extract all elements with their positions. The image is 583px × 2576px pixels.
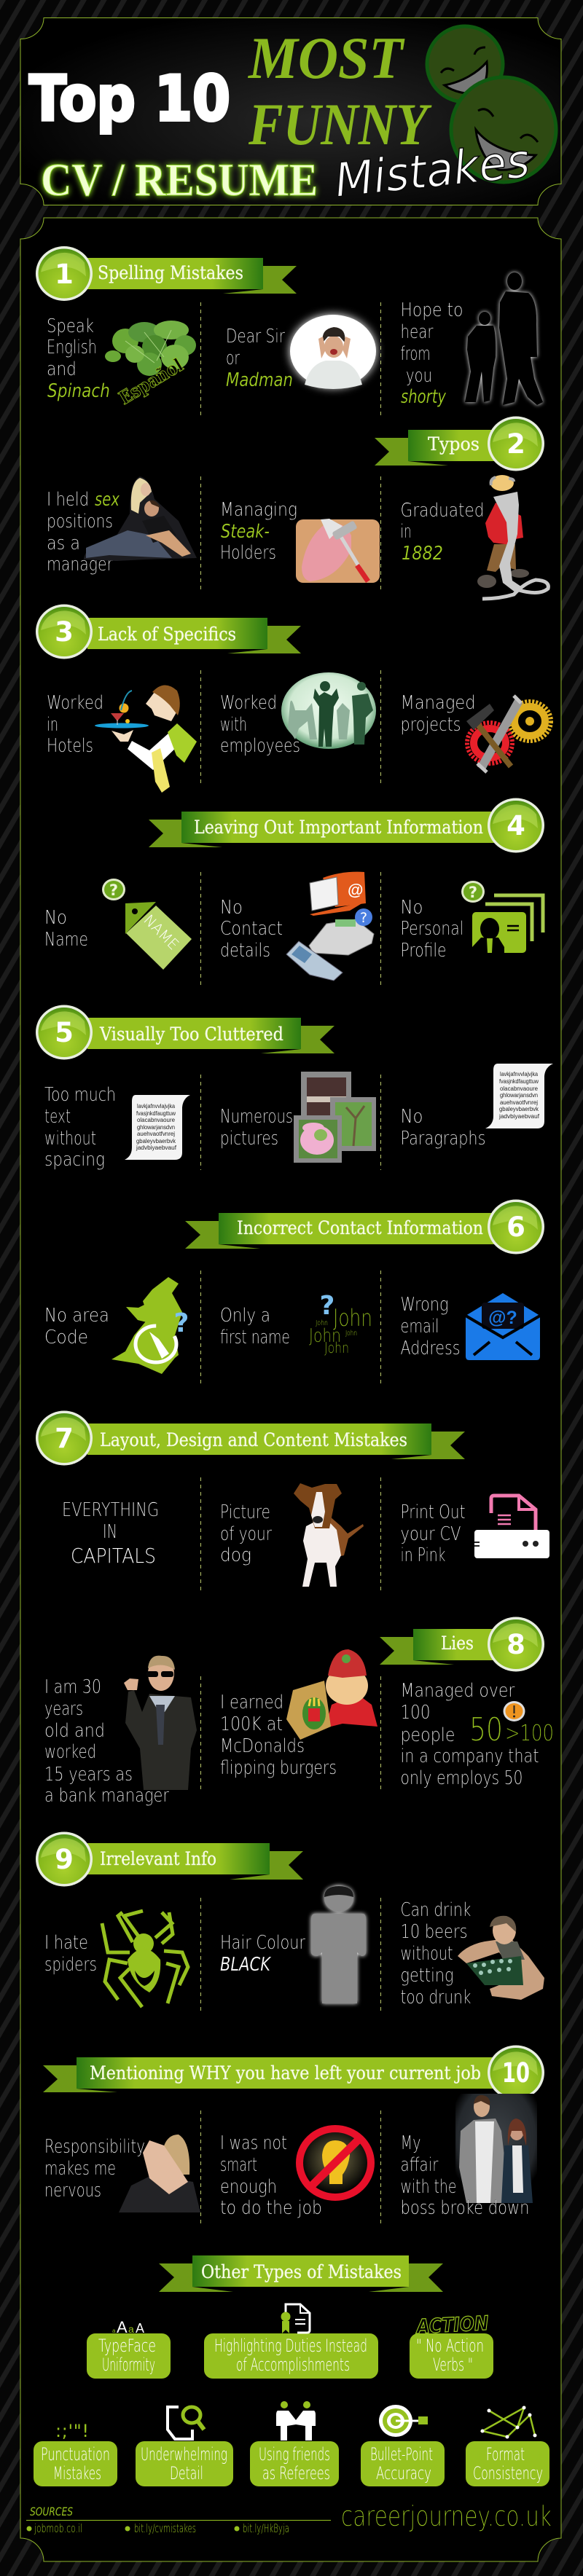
card: typeface uniformity — [87, 2333, 171, 2379]
text: worked in hotels: Worked — [47, 692, 103, 714]
text: no contact details: No — [220, 897, 243, 919]
heading: section 7 ribbon: Layout, Design and Content Mistakes — [100, 1429, 407, 1450]
heading: section 5 ribbon: 5 — [55, 1017, 74, 1048]
text: too much text without spacing — [44, 1084, 116, 1171]
card: highlighting duties: Highlighting Duties Instead — [214, 2336, 367, 2356]
text: picture of your dog: of your — [220, 1523, 272, 1545]
icon: paragraph-free paper: fvasjnkdfaugttuw — [499, 1078, 539, 1085]
icon: certificate document — [281, 2304, 310, 2333]
card: bullet-point accuracy — [361, 2441, 445, 2486]
text: i held sex positions: as a — [47, 533, 80, 554]
heading: section 6 ribbon: Incorrect Contact Information — [237, 1217, 483, 1238]
card: punctuation mistakes: Mistakes — [53, 2463, 101, 2483]
text: wrong email address — [401, 1294, 461, 1359]
heading: section 4 ribbon: Leaving Out Important Information — [194, 817, 483, 838]
text: hope to hear from you shorty: Hope to — [401, 299, 463, 321]
text: i was not smart enough — [220, 2132, 322, 2219]
text: hope to hear from you shorty — [401, 299, 463, 408]
text: no paragraphs: No — [401, 1106, 423, 1128]
text: i earned 100k at mcdonalds: McDonalds — [220, 1735, 305, 1757]
card: underwhelming detail: Underwhelming — [141, 2444, 227, 2465]
icon: punctuation marks: :;'"! — [55, 2421, 89, 2441]
icon: paragraph-free paper: auehvaotfvnrej — [500, 1099, 538, 1106]
text: managing steak-holders: Holders — [220, 542, 276, 564]
text: no name: Name — [44, 929, 88, 951]
text: my affair with the boss broke down: boss broke down — [401, 2197, 529, 2219]
text: wrong email address: email — [401, 1316, 439, 1338]
text: no area code — [44, 1305, 109, 1348]
text: speak english and spinach: Speak — [47, 315, 94, 337]
icon: crowded paper: jadvbiyaebvauf — [136, 1144, 177, 1151]
card: typeface uniformity: Uniformity — [102, 2355, 155, 2375]
text: i was not smart enough: to do the job — [220, 2197, 322, 2219]
heading: section 2 ribbon: 2 — [506, 428, 525, 460]
card: no action verbs — [410, 2333, 493, 2379]
sources: bit.ly/cvmistakes — [134, 2521, 196, 2535]
text: i was not smart enough: I was not — [220, 2132, 287, 2154]
text: too much text without spacing: text — [44, 1106, 71, 1128]
icon: blue envelope: @? — [488, 1308, 517, 1328]
text: hope to hear from you shorty: you — [406, 365, 432, 387]
text: i am 30 years old: a bank manager — [44, 1785, 169, 1807]
text: i held sex positions — [47, 489, 120, 576]
card: no action verbs: " No Action — [416, 2336, 484, 2356]
text: wrong email address: Wrong — [401, 1294, 449, 1316]
text: no contact details: Contact — [220, 918, 283, 940]
sources: jobmob.co.il — [34, 2521, 82, 2535]
text: i earned 100k at mcdonalds: 100K at — [220, 1713, 283, 1735]
text: managed over 100 people: only employs 50 — [401, 1767, 523, 1789]
heading: section 6 ribbon — [185, 1199, 544, 1254]
icon: constellation lines — [481, 2406, 536, 2439]
text: print out your cv in pink — [401, 1501, 465, 1566]
card: punctuation mistakes — [34, 2441, 117, 2486]
text: wrong email address: Address — [401, 1338, 461, 1359]
text: too much text without spacing: Too much — [44, 1084, 116, 1106]
text: my affair with the boss broke down: affair — [401, 2154, 439, 2176]
icon: question and john word cloud: John — [333, 1304, 372, 1332]
card: bullet-point accuracy: Accuracy — [376, 2463, 431, 2483]
text: managed over 100 people: Managed over — [401, 1680, 515, 1702]
title: cv / resume: CV / RESUME — [41, 154, 318, 205]
text: picture of your dog — [220, 1501, 272, 1566]
icon: profile card with question: ? — [469, 884, 477, 901]
text: i was not smart enough: smart — [220, 2154, 257, 2176]
icon: name tag with question: NAME — [140, 911, 182, 954]
text: managed projects — [401, 692, 475, 736]
heading: section 5 ribbon — [36, 1005, 334, 1059]
text: dear sir or madman — [226, 326, 293, 391]
text: can drink 10 beers — [401, 1899, 471, 2008]
text: i am 30 years old: I am 30 — [44, 1676, 101, 1698]
icon: typeface letters: a — [112, 2328, 116, 2334]
card: highlighting duties — [204, 2333, 378, 2379]
image: embracing couple — [84, 476, 197, 561]
text: hope to hear from you shorty: shorty — [401, 386, 446, 408]
heading: section 1 ribbon: 1 — [55, 259, 74, 290]
text: no contact details — [220, 897, 283, 962]
text: my affair with the boss broke down: with the — [401, 2176, 456, 2198]
text: worked in hotels: in — [47, 714, 58, 736]
text: graduated in 1882: in — [401, 521, 411, 543]
heading: section 2 ribbon — [375, 417, 544, 471]
heading: section 6 ribbon: 6 — [506, 1212, 525, 1243]
icon: crowded paper: olacabnvaoure — [137, 1117, 176, 1123]
text: managed over 100 people: 100 — [401, 1702, 430, 1724]
icon: warning and 50>100: >100 — [505, 1721, 554, 1746]
text: speak english and spinach: Spinach — [47, 380, 110, 402]
icon: crowded paper — [125, 1095, 190, 1160]
heading: section 2 ribbon: Typos — [428, 433, 480, 455]
icon: question and john word cloud: John — [324, 1339, 349, 1356]
text: can drink 10 beers: Can drink — [401, 1899, 471, 1921]
icon: typeface letters: a — [128, 2323, 134, 2335]
text: no area code: Code — [44, 1327, 88, 1348]
heading: section 4 ribbon: 4 — [506, 810, 525, 841]
text: i held sex positions: positions — [47, 511, 113, 533]
text: no area code: No area — [44, 1305, 109, 1327]
text: i held sex positions: I held — [47, 489, 89, 511]
title: mistakes: Mistakes — [332, 134, 532, 208]
text: dear sir or madman: Madman — [226, 369, 293, 391]
text: i am 30 years old: 15 years as — [44, 1764, 133, 1786]
text: managed projects: Managed — [401, 692, 475, 714]
heading: section 3 ribbon: 3 — [55, 616, 74, 648]
icon: uk map with phone — [111, 1277, 189, 1374]
image: employees silhouettes circle — [281, 672, 376, 749]
text: my affair with the boss broke down — [401, 2132, 529, 2219]
text: i held sex positions: sex — [95, 489, 120, 511]
text: hair colour black — [220, 1932, 305, 1976]
text: no personal profile: Profile — [401, 940, 446, 962]
icon: name tag with question — [102, 879, 192, 970]
text: everything in capitals: CAPITALS — [71, 1544, 156, 1568]
icon: typeface letters: A — [117, 2318, 128, 2336]
text: i earned 100k at mcdonalds: flipping burgers — [220, 1757, 337, 1779]
text: can drink 10 beers: without — [401, 1943, 453, 1965]
text: worked in hotels — [47, 692, 103, 757]
image: couple on dark photo backdrop — [455, 2094, 537, 2203]
text: hair colour black: BLACK — [220, 1954, 272, 1976]
text: i am 30 years old: worked — [44, 1741, 96, 1763]
text: no personal profile: No — [401, 897, 423, 919]
icon: question and john word cloud: John — [316, 1319, 328, 1327]
text: picture of your dog: dog — [220, 1544, 251, 1566]
heading: section 10 ribbon: Mentioning WHY you have left your current job — [90, 2062, 481, 2084]
icon: question and john word cloud — [309, 1291, 372, 1356]
text: speak english and spinach: English — [47, 337, 97, 358]
image: screaming man in white circle — [290, 315, 376, 389]
text: can drink 10 beers: too drunk — [401, 1987, 471, 2008]
panel: title frame — [20, 17, 561, 205]
icon: crowded paper: gbaleyvbaerbvk — [136, 1138, 176, 1144]
icon: grey person with black hair — [311, 1885, 366, 2003]
image: woman raising hands — [119, 2135, 200, 2212]
icon: typeface letters — [112, 2318, 144, 2336]
heading: section 8 ribbon: 8 — [506, 1629, 525, 1660]
heading: section 4 ribbon — [149, 798, 544, 852]
dashed column dividers — [201, 302, 380, 2223]
text: picture of your dog: Picture — [220, 1501, 270, 1523]
icon: question and john word cloud: John — [345, 1330, 357, 1338]
label: espanol: Español — [115, 354, 187, 409]
text: my affair with the boss broke down: My — [401, 2132, 421, 2154]
card: typeface uniformity: TypeFace — [98, 2336, 156, 2356]
title: most: MOST — [247, 25, 405, 91]
text: i am 30 years old: years — [44, 1698, 83, 1720]
text: can drink 10 beers: getting — [401, 1965, 453, 1987]
text: no contact details: details — [220, 940, 270, 962]
heading: section 7 ribbon — [36, 1410, 465, 1466]
text: too much text without spacing: spacing — [44, 1149, 105, 1171]
text: worked in hotels: Hotels — [47, 735, 93, 757]
text: managing steak-holders: Managing — [220, 499, 297, 521]
icon: spinach leaves — [105, 321, 196, 376]
text: numerous pictures: Numerous — [220, 1106, 293, 1128]
icon: crowded paper: fvasjnkdfaugttuw — [136, 1110, 176, 1117]
icon: printer with pink paper — [474, 1496, 549, 1558]
image: old man with long beard — [477, 475, 548, 599]
icon: no lightbulb sign — [300, 2129, 371, 2197]
text: worked with employees — [220, 692, 300, 757]
icon: target with arrow — [379, 2405, 428, 2437]
heading: section 10 ribbon: 10 — [502, 2057, 530, 2089]
text: responsibility makes me nervous: nervous — [44, 2180, 101, 2202]
image: dog — [294, 1483, 364, 1587]
icon: gears and tools — [466, 696, 551, 772]
title — [29, 25, 532, 208]
card: no action verbs: Verbs " — [433, 2355, 473, 2375]
image: steak and meat cleaver — [296, 519, 380, 583]
sources — [26, 2505, 331, 2535]
heading: section 1 ribbon: Spelling Mistakes — [98, 262, 243, 283]
text: worked with employees: Worked — [220, 692, 277, 714]
text: i earned 100k at mcdonalds: I earned — [220, 1692, 283, 1713]
text: speak english and spinach — [47, 315, 110, 402]
text: everything in capitals — [62, 1499, 159, 1568]
text: responsibility makes me nervous — [44, 2136, 145, 2202]
card: using friends as referees: Using friends — [259, 2444, 330, 2465]
card: format consistency: Consistency — [473, 2463, 543, 2483]
text: too much text without spacing: without — [44, 1128, 96, 1150]
text: i am 30 years old — [44, 1676, 169, 1807]
icon: question and john word cloud: John — [309, 1325, 341, 1347]
card: format consistency: Format — [486, 2444, 525, 2465]
image: boy in suit with sunglasses — [124, 1656, 197, 1790]
title: funny: FUNNY — [248, 91, 432, 157]
text: everything in capitals: IN — [103, 1521, 117, 1543]
heading: other types of mistakes ribbon — [159, 2255, 443, 2292]
text: graduated in 1882 — [401, 500, 484, 565]
text: numerous pictures — [220, 1106, 293, 1150]
text: print out your cv in pink: Print Out — [401, 1501, 465, 1523]
heading: section 8 ribbon — [380, 1617, 544, 1671]
card: highlighting duties: of Accomplishments — [236, 2355, 350, 2375]
text: managed over 100 people — [401, 1680, 539, 1789]
text: managing steak-holders — [220, 499, 297, 564]
text: graduated in 1882: 1882 — [402, 543, 443, 565]
icon: two people shaking hands — [276, 2401, 316, 2440]
text: hope to hear from you shorty: from — [401, 343, 430, 365]
sources: SOURCES — [30, 2505, 73, 2518]
text: i was not smart enough: enough — [220, 2176, 277, 2198]
icon: paragraph-free paper: ghlowarjansdvn — [500, 1092, 538, 1099]
icon: warning and 50>100: 50 — [469, 1711, 503, 1748]
icon: laughing faces — [427, 26, 556, 182]
text: i hate spiders: spiders — [44, 1954, 97, 1976]
text: no name: No — [44, 907, 67, 929]
text: graduated in 1882: Graduated — [401, 500, 484, 522]
heading: section 7 ribbon: 7 — [55, 1423, 74, 1454]
card: punctuation mistakes: Punctuation — [41, 2444, 110, 2465]
icon: green spider — [102, 1911, 188, 2007]
card: using friends as referees — [250, 2441, 339, 2486]
text: print out your cv in pink: your CV — [401, 1523, 461, 1545]
icon: paragraph-free paper — [485, 1064, 553, 1128]
icon: crowded paper: ghlowarjansdvn — [137, 1124, 175, 1131]
text: managed projects: projects — [401, 714, 461, 736]
heading: section 3 ribbon: Lack of Specifics — [98, 624, 236, 645]
icon: question and john word cloud: ? — [320, 1291, 334, 1321]
card: underwhelming detail: Detail — [170, 2463, 203, 2483]
card: bullet-point accuracy: Bullet-Point — [370, 2444, 433, 2465]
text: hair colour black: Hair Colour — [220, 1932, 305, 1954]
heading: section 3 ribbon — [36, 605, 301, 659]
text: no paragraphs — [401, 1106, 485, 1150]
icon: crowded paper: lavkjafnvvlajvjka — [137, 1103, 175, 1110]
text: i held sex positions: manager — [47, 554, 113, 576]
text: print out your cv in pink: in Pink — [401, 1544, 446, 1566]
icon: paragraph-free paper: jadvbiyaebvauf — [498, 1113, 540, 1120]
icon: document with magnifier — [168, 2407, 204, 2439]
text: hope to hear from you shorty: hear — [401, 321, 434, 343]
card: using friends as referees: as Referees — [262, 2463, 330, 2483]
sources: bit.ly/HkByja — [243, 2521, 289, 2535]
text: no name — [44, 907, 88, 951]
text: i am 30 years old: old and — [44, 1720, 105, 1742]
text: worked with employees: with — [220, 714, 247, 736]
text: no personal profile — [401, 897, 463, 962]
text: can drink 10 beers: 10 beers — [401, 1921, 468, 1943]
icon: crowded paper: auehvaotfvnrej — [137, 1131, 175, 1137]
title: top 10: Top 10 — [29, 63, 230, 136]
card: underwhelming detail — [136, 2441, 233, 2486]
text: dear sir or madman: or — [226, 347, 240, 369]
icon: paragraph-free paper: gbaleyvbaerbvk — [499, 1106, 539, 1112]
text: worked with employees: employees — [220, 735, 300, 757]
text: speak english and spinach: and — [47, 358, 77, 380]
text: no paragraphs: Paragraphs — [401, 1128, 485, 1150]
text: only a first name: Only a — [220, 1305, 270, 1327]
heading: section 9 ribbon: 9 — [55, 1844, 74, 1875]
icon: uk map with phone: ? — [174, 1308, 189, 1338]
text: numerous pictures: pictures — [220, 1128, 278, 1150]
text: everything in capitals: EVERYTHING — [62, 1499, 159, 1521]
icon: mailbox phone and mobile: @ — [348, 881, 363, 899]
icon: paragraph-free paper: lavkjafnvvlajvjka — [500, 1071, 538, 1077]
text: i hate spiders — [44, 1932, 97, 1976]
icon: blue envelope — [466, 1293, 540, 1360]
image: drunk man with beer cans — [458, 1916, 544, 2000]
text: dear sir or madman: Dear Sir — [226, 326, 285, 347]
image: overlapping framed pictures — [294, 1072, 376, 1163]
icon: typeface letters: A — [136, 2321, 144, 2336]
icon: tall and short silhouettes — [465, 272, 543, 405]
text: i earned 100k at mcdonalds — [220, 1692, 337, 1779]
text: managed over 100 people: people — [401, 1724, 455, 1746]
card: format consistency — [466, 2441, 549, 2486]
text: managed over 100 people: in a company that — [401, 1746, 539, 1767]
icon: mailbox phone and mobile: ? — [360, 910, 367, 926]
text: i hate spiders: I hate — [44, 1932, 88, 1954]
heading: section 5 ribbon: Visually Too Cluttered — [99, 1024, 283, 1045]
icon: mailbox phone and mobile — [286, 872, 374, 981]
text: responsibility makes me nervous: makes me — [44, 2158, 116, 2180]
text: managing steak-holders: Steak- — [221, 521, 270, 543]
image: waiter with tray — [95, 685, 197, 793]
heading: section 9 ribbon — [36, 1831, 303, 1887]
heading: other types of mistakes ribbon: Other Types of Mistakes — [201, 2261, 402, 2282]
heading: section 9 ribbon: Irrelevant Info — [100, 1848, 216, 1869]
icon: warning and 50>100 — [469, 1701, 554, 1748]
text: no personal profile: Personal — [401, 918, 463, 940]
text: only a first name: first name — [220, 1327, 290, 1348]
label: action: ACTION — [415, 2312, 490, 2339]
icon: fast food worker and bag — [286, 1649, 377, 1740]
icon: profile card with question — [461, 881, 543, 953]
heading: section 10 ribbon — [43, 2046, 544, 2100]
heading: section 1 ribbon — [36, 246, 297, 301]
icon: name tag with question: ? — [109, 881, 118, 899]
text: only a first name — [220, 1305, 290, 1348]
heading: section 8 ribbon: Lies — [441, 1633, 474, 1654]
text: responsibility makes me nervous: Responsibility — [44, 2136, 145, 2158]
icon: paragraph-free paper: olacabnvaoure — [500, 1085, 539, 1092]
